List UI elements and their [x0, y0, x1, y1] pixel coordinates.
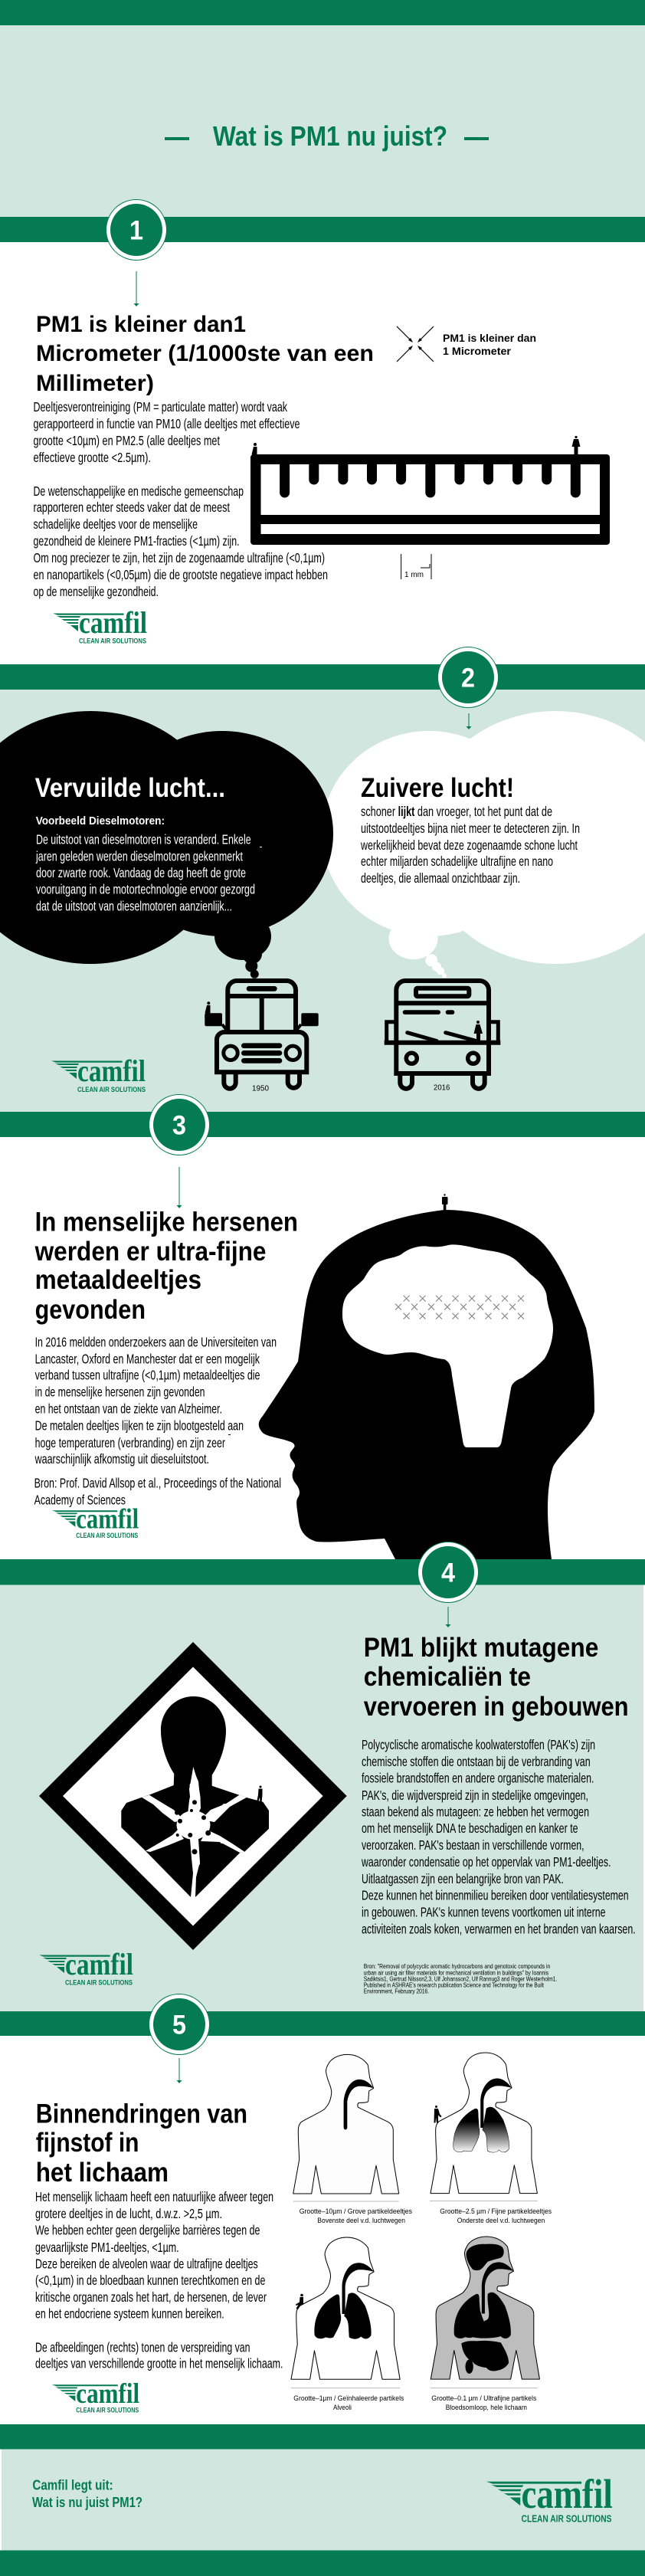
text block: polluted air: dat de uitstoot van dieselmotoren aanzienlijk...: [36, 898, 232, 913]
icon: bus 1950: [205, 981, 319, 1089]
icon: converging arrows: [397, 326, 434, 362]
caption: [300, 2207, 412, 2225]
text block: source: Academy of Sciences: [34, 1493, 126, 1508]
panel: section 4: [39, 1633, 636, 1994]
text block: intro: rapporteren echter steeds vaker dat de meest: [34, 500, 230, 515]
title: Wat is PM1 nu juist?: [213, 120, 447, 152]
band: bottom: [0, 2550, 645, 2576]
divider line: [293, 2201, 399, 2202]
text block: body defence: (<0,1µm) in de bloedbaan kunnen terechtkomen en de: [35, 2273, 265, 2288]
diagram: body 10 micrometer: [293, 2054, 412, 2225]
text block: study: In 2016 meldden onderzoekers aan de Universiteiten van: [35, 1334, 277, 1349]
logo: camfil: camfil: [77, 1054, 146, 1088]
text block: study: verband tussen ultrafijne (<0,1µm) metaaldeeltjes die: [35, 1367, 260, 1382]
badge: step 3: [149, 1094, 210, 1155]
text block: polluted air: Vervuilde lucht...: [35, 773, 225, 803]
icon: standing woman on ruler: [571, 436, 581, 454]
text block: PAK: [361, 1737, 636, 1936]
badge: step 5: 5: [172, 2011, 186, 2040]
badge: step 2: [438, 647, 498, 708]
logo: camfil: [52, 2378, 139, 2414]
arrow: step 2: [466, 713, 472, 729]
arrow: step 5: [176, 2058, 182, 2083]
text block: body defence: We hebben echter geen dergelijke barrières tegen de: [35, 2223, 260, 2238]
text block: clean air: echter miljarden schadelijke ultrafijne en nano: [361, 854, 553, 869]
text block: clean air: schoner lijkt dan vroeger, tot het punt dat de: [361, 804, 552, 819]
text block: polluted air: jaren geleden werden dieselmotoren gekenmerkt: [35, 849, 243, 864]
caption: Bovenste deel v.d. luchtwegen: [317, 2217, 405, 2225]
scale: 1 mm: 1 mm: [404, 571, 424, 579]
heading: het lichaam: [36, 2158, 169, 2188]
caption: Grootte–0.1 µm / Ultrafijne partikels: [431, 2394, 537, 2403]
heading: Micrometer (1/1000ste van een: [36, 341, 374, 366]
logo: camfil: camfil: [79, 605, 147, 640]
text block: intro: gerapporteerd in functie van PM10 (alle deeltjes met effectieve: [34, 416, 300, 431]
band: footer top: [0, 2424, 645, 2449]
arrow: step 4: [446, 1607, 450, 1627]
band: section 4: [0, 1559, 645, 1585]
text block: source: Bron: Prof. David Allsop et al., Proceedings of the National: [34, 1475, 281, 1490]
logo: camfil: [53, 605, 147, 645]
band: section 3: [0, 1112, 645, 1137]
heading: chemicaliën te: [364, 1662, 531, 1692]
band: section 5: [0, 2011, 645, 2036]
logo: camfil: [486, 2471, 613, 2525]
text block: intro: schadelijke deeltjes voor de menselijke: [34, 516, 198, 532]
icon: head silhouette with brain: [259, 1210, 594, 1559]
heading: PM1 is kleiner dan1: [36, 312, 246, 337]
text block: polluted air: [35, 773, 262, 913]
text block: body defence: en het endocriene systeem kunnen bereiken.: [35, 2306, 224, 2322]
divider line: [431, 2388, 538, 2389]
band: section 2: [0, 664, 645, 690]
icon: seated person on ruler: [251, 443, 257, 460]
logo: camfil: camfil: [76, 1503, 139, 1535]
scale: 1 mm: [401, 554, 431, 579]
icon: person on head: [442, 1194, 447, 1211]
logo: camfil: CLEAN AIR SOLUTIONS: [65, 1978, 133, 1987]
panel: title background: [0, 25, 645, 217]
hazard figure: [121, 1696, 269, 1897]
text block: source: [364, 1963, 557, 1994]
heading: metaaldeeltjes: [35, 1265, 201, 1295]
badge: step 1: 1: [129, 216, 143, 245]
text block: body defence: De afbeeldingen (rechts) tonen de verspreiding van: [35, 2340, 250, 2355]
text block: PAK: Uitlaatgassen zijn een belangrijke bron van PAK.: [362, 1871, 564, 1886]
caption: Onderste deel v.d. luchtwegen: [457, 2217, 545, 2225]
text block: study: in de menselijke hersenen zijn gevonden: [35, 1384, 205, 1399]
heading: [364, 1633, 629, 1722]
heading: gevonden: [35, 1295, 146, 1325]
icon: person on hazard figure: [257, 1785, 262, 1802]
logo: camfil: [39, 1947, 133, 1987]
callout: PM1 size: [443, 332, 536, 357]
cloud: polluted air (black): [0, 711, 333, 978]
callout: PM1 size: 1 Micrometer: [443, 345, 512, 357]
hazard burst: [142, 1767, 247, 1897]
logo: camfil: CLEAN AIR SOLUTIONS: [77, 1086, 146, 1094]
logo: camfil: CLEAN AIR SOLUTIONS: [79, 637, 146, 645]
logo: camfil: camfil: [65, 1947, 133, 1981]
icon: health hazard diamond: [39, 1642, 347, 1950]
icon: walking person on body: [434, 2106, 441, 2122]
diagram: body 0.1 micrometer: [431, 2237, 539, 2412]
panel: section 2 background: [0, 690, 645, 1112]
text block: footer: [32, 2477, 142, 2510]
logo: camfil: camfil: [76, 2378, 139, 2410]
text block: intro: grootte <10µm) en PM2.5 (alle deeltjes met: [34, 433, 220, 448]
logo: camfil: CLEAN AIR SOLUTIONS: [522, 2513, 611, 2525]
icon: standing woman on bus: [473, 1021, 483, 1041]
heading: PM1 blijkt mutagene: [364, 1633, 598, 1663]
arrow: step 3: [176, 1167, 182, 1208]
diagram: body 1 micrometer: [291, 2237, 404, 2412]
text block: polluted air: Voorbeeld Dieselmotoren:: [36, 814, 165, 828]
band: section 1: [0, 217, 645, 242]
text block: intro: gezondheid de kleinere PM1-fracties (<1µm) zijn.: [34, 533, 239, 549]
text block: clean air: [360, 773, 580, 886]
caption: Bloedsomloop, hele lichaam: [446, 2404, 527, 2412]
heading: werden er ultra-fijne: [34, 1237, 267, 1267]
text block: polluted air: De uitstoot van dieselmotoren is veranderd. Enkele: [36, 832, 251, 847]
text block: body defence: [35, 2189, 283, 2371]
diagram: body 2.5 micrometer: [430, 2053, 552, 2225]
text block: polluted air: vooruitgang in de motortechnologie ervoor gezorgd: [36, 882, 255, 897]
heading: Millimeter): [36, 371, 154, 396]
icon: seated person on body: [296, 2294, 303, 2309]
logo: camfil: CLEAN AIR SOLUTIONS: [76, 2406, 139, 2414]
text block: intro: Deeltjesverontreiniging (PM = particulate matter) wordt vaak: [34, 399, 287, 415]
text block: study: De metalen deeltjes lijken te zijn blootgesteld aan: [35, 1418, 244, 1434]
logo: camfil: [52, 1503, 139, 1539]
text block: source: [34, 1475, 281, 1508]
heading: [36, 2099, 247, 2188]
icon: bus 2016: [385, 981, 500, 1089]
panel: section 3: [34, 1194, 594, 1559]
caption: [431, 2394, 537, 2412]
text block: body defence: Het menselijk lichaam heeft een natuurlijke afweer tegen: [35, 2189, 273, 2204]
text block: clean air: deeltjes, die allemaal onzichtbaar zijn.: [361, 870, 520, 886]
text block: source: Sadiktsis1, Gertrud Nilsson2,3, Ulf Johansson2, Ulf Rannug3 and Roger Westerholm1.: [364, 1975, 557, 1982]
cloud: clean air (white): [322, 711, 645, 978]
text block: source: Published in ASHRAE's research publication Science and Technology for the Built: [364, 1981, 545, 1988]
divider line: [291, 2388, 400, 2389]
panel: section 2: [0, 711, 645, 1094]
label: 1950: 1950: [252, 1083, 269, 1093]
logo: camfil: CLEAN AIR SOLUTIONS: [76, 1532, 138, 1539]
icon: ruler: [250, 454, 610, 545]
panel: section 5: [35, 2053, 552, 2414]
badge: step 4: [418, 1542, 478, 1603]
text block: footer: Wat is nu juist PM1?: [32, 2495, 142, 2510]
text block: footer: Camfil legt uit:: [32, 2477, 113, 2492]
heading: Binnendringen van: [36, 2099, 247, 2129]
text block: intro: De wetenschappelijke en medische gemeenschap: [34, 483, 244, 499]
text block: intro: op de menselijke gezondheid.: [34, 584, 159, 599]
caption: [440, 2207, 552, 2225]
badge: step 3: 3: [172, 1111, 186, 1140]
text block: intro: Om nog preciezer te zijn, het zijn de zogenaamde ultrafijne (<0,1µm): [34, 550, 325, 565]
badge: step 4: 4: [441, 1558, 455, 1588]
text block: clean air: Zuivere lucht!: [361, 773, 514, 803]
panel: section 1: [34, 312, 610, 645]
text block: polluted air: door zwarte rook. Vandaag de dag heeft de grote: [36, 865, 246, 880]
text block: intro: [34, 399, 328, 599]
caption: Alveoli: [333, 2404, 352, 2412]
text block: body defence: grotere deeltjes in de lucht, d.w.z. >2,5 µm.: [35, 2206, 222, 2221]
text block: study: [34, 1334, 277, 1467]
text block: study: Lancaster, Oxford en Manchester dat er een mogelijk: [35, 1352, 260, 1367]
panel: section 4 background: [0, 1585, 643, 2011]
text block: body defence: deeltjes van verschillende grootte in het menselijk lichaam.: [35, 2355, 283, 2371]
text block: source: urban air using air filter materials for mechanical ventilation in buildings" by Ioannis: [364, 1969, 548, 1976]
panel: footer: [32, 2471, 613, 2525]
icon: seated person on bus: [205, 1001, 210, 1018]
badge: step 2: 2: [461, 664, 475, 693]
heading: [36, 312, 374, 396]
caption: Grootte–10µm / Grove partikeldeeltjes: [300, 2207, 412, 2216]
text block: intro: effectieve grootte <2.5µm).: [34, 450, 151, 465]
text block: intro: en nanopartikels (<0,05µm) die de grootste negatieve impact hebben: [34, 567, 328, 582]
heading: fijnstof in: [36, 2128, 139, 2158]
logo: camfil: [51, 1054, 146, 1094]
caption: [293, 2394, 404, 2412]
callout: PM1 size: PM1 is kleiner dan: [443, 332, 536, 344]
text block: study: en het ontstaan van de ziekte van Alzheimer.: [35, 1401, 222, 1417]
caption: Grootte–1µm / Geïnhaleerde partikels: [293, 2394, 404, 2403]
heading: In menselijke hersenen: [35, 1208, 298, 1237]
text block: body defence: gevaarlijkste PM1-deeltjes, <1µm.: [35, 2240, 179, 2255]
panel: footer background: [2, 2449, 645, 2551]
badge: step 1: [106, 199, 167, 261]
text block: study: waarschijnlijk afkomstig uit dieseluitstoot.: [34, 1451, 209, 1467]
text block: body defence: kritische organen zoals het hart, de hersenen, de lever: [35, 2289, 267, 2305]
band: top: [0, 0, 645, 25]
heading: [34, 1208, 298, 1325]
text block: source: Bron: "Removal of polycyclic aromatic hydrocarbons and genotoxic compounds in: [364, 1963, 551, 1970]
divider line: [430, 2201, 538, 2202]
badge: step 5: [149, 1994, 210, 2055]
arrow: step 1: [133, 271, 139, 306]
icon: particles in brain: [395, 1296, 524, 1319]
caption: Grootte–2.5 µm / Fijne partikeldeeltjes: [440, 2207, 552, 2216]
brain: [342, 1244, 553, 1447]
text block: source: Environment, February 2016.: [364, 1988, 429, 1994]
logo: camfil: camfil: [522, 2471, 613, 2517]
text block: study: hoge temperaturen (verbranding) en zijn zeer: [35, 1435, 225, 1450]
text block: body defence: Deze bereiken de alveolen waar de ultrafijne deeltjes: [35, 2256, 258, 2272]
label: 2016: 2016: [434, 1083, 450, 1092]
